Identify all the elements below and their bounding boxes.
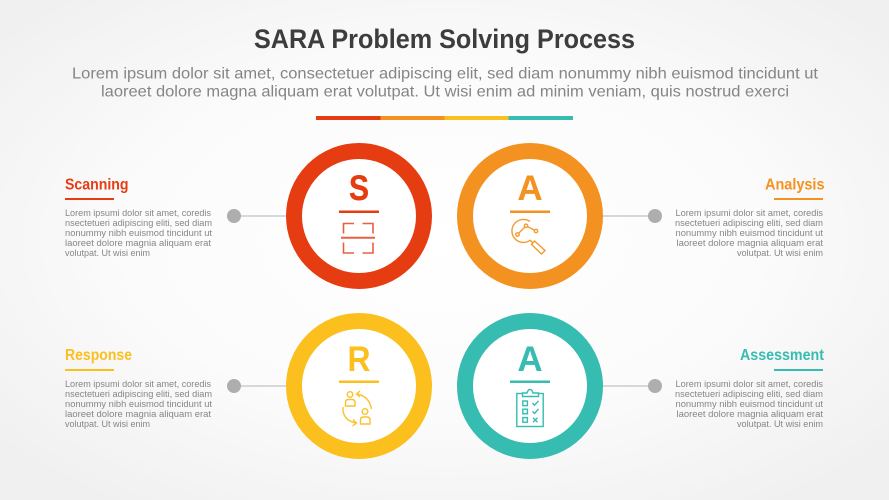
text block: response: volutpat. Ut wisi enim [65, 419, 150, 429]
text block: assessment: nsectetueri adipiscing eliti, sed diam [675, 389, 823, 399]
circle: R: R [348, 340, 370, 379]
circle: R [294, 321, 424, 451]
text block: analysis: laoreet dolore magnia aliquam erat [676, 238, 824, 248]
panel: scanning [65, 176, 213, 258]
icon: magnifier with nodes [512, 219, 545, 254]
text block: scanning: laoreet dolore magnia aliquam erat [65, 238, 212, 248]
icon: scan frame [341, 224, 375, 253]
text block: assessment: nonummy nibh euismod tincidunt ut [676, 399, 824, 409]
connectors with grey dots [227, 209, 662, 393]
text block: assessment [675, 379, 824, 429]
heading: assessment: Assessment [740, 347, 825, 364]
text block: response: Lorem ipsumi dolor sit amet, coredis [65, 379, 211, 389]
circle: A (assessment) [465, 321, 595, 451]
heading underline: response [65, 369, 114, 371]
icon: clipboard checklist [517, 390, 543, 426]
text block: assessment: laoreet dolore magnia aliquam erat [676, 409, 824, 419]
text block: scanning: nsectetueri adipiscing eliti, sed diam [65, 218, 212, 228]
text block: analysis [675, 208, 824, 258]
circle: S: S [349, 169, 369, 208]
heading: scanning: Scanning [65, 176, 128, 194]
heading: analysis: Analysis [765, 176, 825, 194]
text block: scanning: nonummy nibh euismod tincidunt ut [65, 228, 213, 238]
text block: analysis: nsectetueri adipiscing eliti, sed diam [675, 218, 823, 228]
text block: analysis: volutpat. Ut wisi enim [737, 248, 823, 258]
heading underline: assessment [774, 369, 823, 371]
title: SARA Problem Solving Process [254, 24, 635, 54]
icon: people exchange [343, 391, 372, 426]
text block: response [65, 379, 213, 429]
heading underline: scanning [65, 198, 114, 200]
circle: A (analysis) [465, 151, 595, 281]
text block: assessment: volutpat. Ut wisi enim [737, 419, 823, 429]
text block: response: nonummy nibh euismod tincidunt ut [65, 399, 213, 409]
text block: response: laoreet dolore magnia aliquam erat [65, 409, 212, 419]
four-colour title divider [316, 116, 573, 120]
text block: scanning: volutpat. Ut wisi enim [65, 248, 150, 258]
heading underline: analysis [774, 198, 823, 200]
text block: scanning [65, 208, 213, 258]
circle: S [294, 151, 424, 281]
subtitle text block [72, 66, 819, 100]
panel: analysis [675, 176, 825, 258]
text block: analysis: nonummy nibh euismod tincidunt ut [676, 228, 824, 238]
text block: assessment: Lorem ipsumi dolor sit amet, coredis [676, 379, 824, 389]
heading: response: Response [65, 347, 132, 364]
circle: A (assessment): A [517, 340, 543, 379]
circle: A (analysis): A [517, 169, 543, 208]
panel: assessment [675, 347, 825, 429]
text block: analysis: Lorem ipsumi dolor sit amet, coredis [676, 208, 824, 218]
subtitle text block: laoreet dolore magna aliquam erat volutpat. Ut wisi enim ad minim veniam, quis nostrud exerci [101, 84, 789, 100]
subtitle text block: Lorem ipsum dolor sit amet, consectetuer adipiscing elit, sed diam nonummy nibh euismod tincidunt ut [72, 66, 819, 82]
panel: response [65, 347, 213, 429]
text block: response: nsectetueri adipiscing eliti, sed diam [65, 389, 212, 399]
text block: scanning: Lorem ipsumi dolor sit amet, coredis [65, 208, 211, 218]
